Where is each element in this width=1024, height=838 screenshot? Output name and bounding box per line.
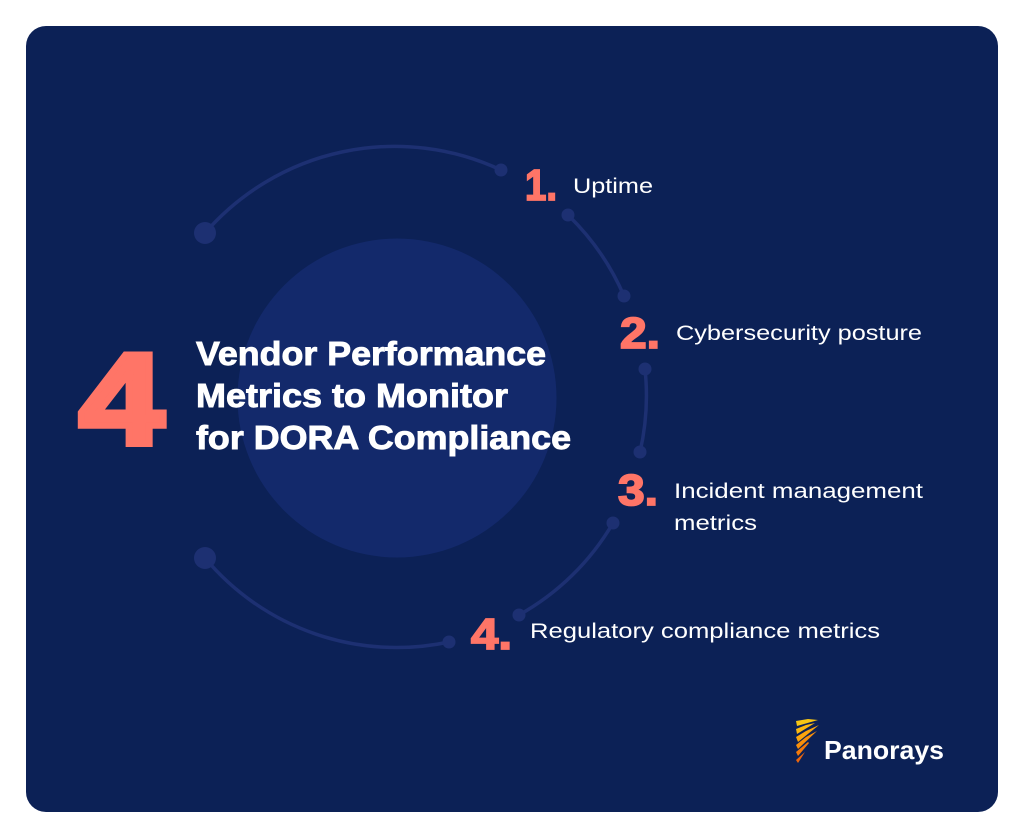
title: Metrics to Monitor (196, 377, 508, 414)
item 3: Incident management metrics (618, 466, 923, 535)
title: Vendor Performance (196, 335, 546, 372)
arc: item 2 to item 3 (634, 362, 652, 458)
item 4: Regulatory compliance metrics: Regulatory compliance metrics (530, 620, 880, 643)
title (196, 335, 571, 456)
item 1: Uptime: 1. (525, 161, 557, 210)
arc: top, to item 1 (194, 146, 508, 244)
arc: bottom, from item 4 (194, 547, 456, 648)
logo: Panorays (796, 719, 944, 765)
item 4: Regulatory compliance metrics (471, 610, 880, 659)
item 2: Cybersecurity posture: Cybersecurity posture (676, 322, 922, 345)
item 3: Incident management metrics: metrics (674, 512, 757, 535)
wordmark: Panorays (824, 735, 944, 765)
item 3: Incident management metrics: 3. (618, 466, 658, 515)
title: for DORA Compliance (196, 419, 571, 456)
big numeral 4: 4 (79, 326, 164, 472)
item 4: Regulatory compliance metrics: 4. (471, 610, 512, 659)
arc: item 1 to item 2 (562, 208, 630, 302)
item 2: Cybersecurity posture: 2. (620, 309, 660, 358)
central circle (238, 238, 556, 558)
item 3: Incident management metrics: Incident management (674, 480, 923, 503)
item 1: Uptime (525, 161, 653, 210)
item 2: Cybersecurity posture (620, 309, 922, 358)
item 1: Uptime: Uptime (573, 175, 653, 198)
icon: rays (796, 719, 819, 763)
arc: item 3 to item 4 (512, 516, 620, 622)
